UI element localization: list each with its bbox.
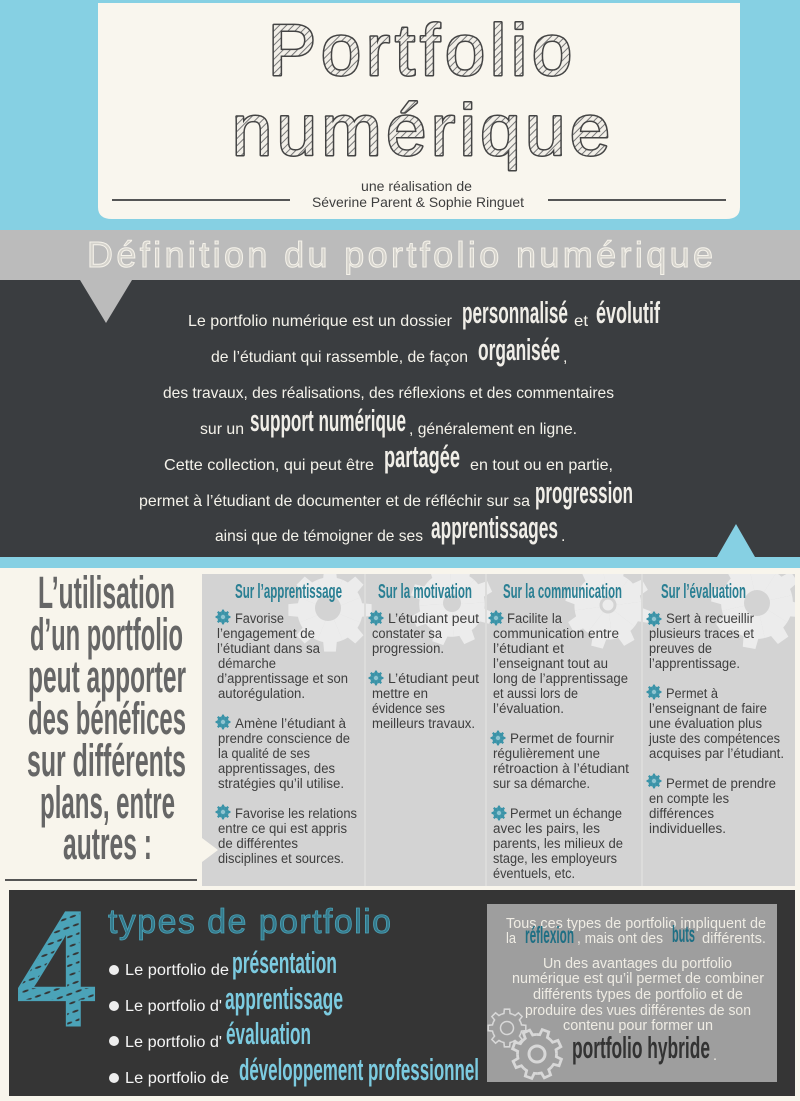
column: communication: éventuels, etc. xyxy=(493,866,575,881)
definition text: progression xyxy=(535,475,633,510)
heading: benefits: autres : xyxy=(63,818,152,869)
definition text: et xyxy=(574,313,589,330)
heading: benefits xyxy=(5,567,197,881)
column: communication: sur sa démarche. xyxy=(493,776,590,791)
definition text: . xyxy=(561,528,565,545)
column: apprentissage: Favorise xyxy=(235,611,284,626)
column: communication: parents, les milieux de xyxy=(493,836,623,851)
definition text: sur un xyxy=(200,421,244,438)
note text: buts xyxy=(672,921,695,947)
definition text: évolutif xyxy=(596,295,660,330)
column: motivation: mettre en xyxy=(372,686,428,701)
column: apprentissage: Favorise les relations xyxy=(235,806,357,821)
note text: produire des vues différentes de son xyxy=(525,1003,751,1019)
column: communication: stage, les employeurs xyxy=(493,851,617,866)
column: communication: l’évaluation. xyxy=(493,701,564,716)
column: apprentissage: l’engagement de xyxy=(217,626,315,641)
column dividers xyxy=(364,574,643,886)
definition text: de l’étudiant qui rassemble, de façon xyxy=(211,349,468,366)
column: motivation: Sur la motivation xyxy=(378,581,472,603)
column: evaluation: Sert à recueillir xyxy=(666,611,754,626)
column: evaluation: Permet de prendre xyxy=(666,776,776,791)
credits xyxy=(112,178,726,210)
list of types xyxy=(109,945,479,1087)
note text xyxy=(506,916,766,1065)
column: evaluation xyxy=(647,581,784,836)
column: communication: l’enseignant tout au xyxy=(493,656,608,671)
title xyxy=(232,11,610,171)
column: apprentissage: l’étudiant dans sa xyxy=(217,641,320,656)
column: apprentissage: apprentissages, des xyxy=(218,761,335,776)
list of types: Le portfolio d' xyxy=(125,1034,222,1051)
list of types: Le portfolio de xyxy=(125,962,229,979)
column: apprentissage: de différentes xyxy=(218,836,298,851)
callout pointer: grey xyxy=(80,280,132,323)
panel: types of portfolio xyxy=(9,877,795,1096)
column: communication xyxy=(489,581,629,881)
heading: benefits: peut apporter xyxy=(28,651,186,702)
gear outlines xyxy=(488,1009,569,1086)
heading: definition: Définition du portfolio numérique xyxy=(87,234,713,275)
note text: , mais ont des xyxy=(577,931,663,947)
heading: benefits: L’utilisation xyxy=(38,567,175,618)
column: evaluation: Permet à xyxy=(666,686,718,701)
column: communication: Sur la communication xyxy=(503,581,622,603)
note text: réflexion xyxy=(525,922,574,948)
definition text: partagée xyxy=(384,439,460,474)
column: communication: avec les pairs, les xyxy=(493,821,600,836)
column: apprentissage: autorégulation. xyxy=(218,686,305,701)
column: apprentissage: disciplines et sources. xyxy=(218,851,344,866)
heading: benefits: plans, entre xyxy=(40,777,175,828)
panel: definition xyxy=(0,280,800,557)
column: motivation: constater sa xyxy=(372,626,442,641)
definition text: support numérique xyxy=(250,403,406,438)
column: evaluation: plusieurs traces et xyxy=(649,626,754,641)
heading: benefits: sur différents xyxy=(27,735,186,786)
column: apprentissage: entre ce qui est appris xyxy=(218,821,347,836)
credits: une réalisation de xyxy=(361,178,472,194)
definition text: apprentissages xyxy=(431,510,558,545)
definition text: des travaux, des réalisations, des réflexions et des commentaires xyxy=(163,385,614,402)
panel: definition heading band xyxy=(0,230,800,280)
panel: benefits xyxy=(202,550,800,886)
note text: numérique est qu’il permet de combiner xyxy=(512,971,764,987)
column: communication: régulièrement une xyxy=(493,746,600,761)
definition text: ainsi que de témoigner de ses xyxy=(215,528,423,545)
definition text: permet à l’étudiant de documenter et de réfléchir sur sa xyxy=(139,493,530,510)
list of types: présentation xyxy=(232,945,337,980)
column: evaluation: individuelles. xyxy=(649,821,726,836)
definition text xyxy=(139,295,660,545)
note text: . xyxy=(713,1048,717,1064)
column: communication: Permet de fournir xyxy=(510,731,615,746)
note text: la xyxy=(506,931,517,947)
definition text: organisée xyxy=(478,332,560,367)
panel: hybrid note xyxy=(487,904,777,1086)
list of types: développement professionnel xyxy=(239,1052,479,1087)
column: evaluation: l’apprentissage. xyxy=(649,656,740,671)
list of types: apprentissage xyxy=(225,981,343,1016)
column: communication: rétroaction à l’étudiant xyxy=(493,761,629,776)
definition text: , xyxy=(563,349,567,366)
column: evaluation: une évaluation plus xyxy=(649,716,762,731)
column: evaluation: l’enseignant de faire xyxy=(649,701,767,716)
column: apprentissage: Sur l’apprentissage xyxy=(235,581,342,603)
column: evaluation: en compte les xyxy=(649,791,729,806)
column: communication: long de l’apprentissage xyxy=(493,671,628,686)
column: motivation: évidence ses xyxy=(372,701,445,716)
title: numérique xyxy=(232,91,610,171)
column: communication: communication entre xyxy=(493,626,619,641)
column: evaluation: acquises par l’étudiant. xyxy=(649,746,784,761)
definition text: , généralement en ligne. xyxy=(409,421,577,438)
definition text: Cette collection, qui peut être xyxy=(164,457,374,474)
note text: Un des avantages du portfolio xyxy=(543,956,732,972)
column: evaluation: différences xyxy=(649,806,714,821)
title: Portfolio xyxy=(268,11,572,91)
column: apprentissage: la qualité de ses xyxy=(218,746,310,761)
top blue band xyxy=(0,0,800,230)
column: communication: Facilite la xyxy=(507,611,562,626)
column: apprentissage: démarche xyxy=(218,656,276,671)
column: motivation: meilleurs travaux. xyxy=(372,716,475,731)
heading: benefits: des bénéfices xyxy=(28,693,186,744)
notch xyxy=(202,838,218,862)
column: apprentissage xyxy=(216,581,357,866)
big number 4: 4 xyxy=(16,877,98,1060)
note text: Tous ces types de portfolio impliquent de xyxy=(506,916,766,932)
note text: différents. xyxy=(702,931,766,947)
column: apprentissage: stratégies qu’il utilise. xyxy=(218,776,344,791)
note text: différents types de portfolio et de xyxy=(533,987,743,1003)
background gears xyxy=(288,574,795,652)
definition text: en tout ou en partie, xyxy=(470,457,613,474)
panel: header xyxy=(98,3,740,219)
definition text: Le portfolio numérique est un dossier xyxy=(188,313,453,330)
list of types: Le portfolio de xyxy=(125,1070,229,1087)
note text: contenu pour former un xyxy=(563,1018,713,1034)
heading: benefits: d’un portfolio xyxy=(30,609,183,660)
column: evaluation: preuves de xyxy=(649,641,712,656)
blue separator band xyxy=(0,557,800,568)
list of types: Le portfolio d' xyxy=(125,998,222,1015)
column: apprentissage: d’apprentissage et son xyxy=(217,671,348,686)
column: communication: l’étudiant et xyxy=(493,641,564,656)
column: motivation: L’étudiant peut xyxy=(388,671,479,686)
heading: types: types de portfolio xyxy=(108,903,391,941)
column: communication: et aussi lors de xyxy=(493,686,578,701)
column: evaluation: juste des compétences xyxy=(648,731,780,746)
column: motivation xyxy=(369,581,479,731)
column: motivation: L’étudiant peut xyxy=(388,611,479,626)
column: apprentissage: prendre conscience de xyxy=(218,731,350,746)
credits: Séverine Parent & Sophie Ringuet xyxy=(312,194,524,210)
definition text: personnalisé xyxy=(462,295,568,330)
list of types: évaluation xyxy=(226,1016,311,1051)
column: communication: Permet un échange xyxy=(510,806,622,821)
column: motivation: progression. xyxy=(372,641,444,656)
callout pointer: blue xyxy=(717,524,755,557)
column: apprentissage: Amène l’étudiant à xyxy=(235,716,346,731)
